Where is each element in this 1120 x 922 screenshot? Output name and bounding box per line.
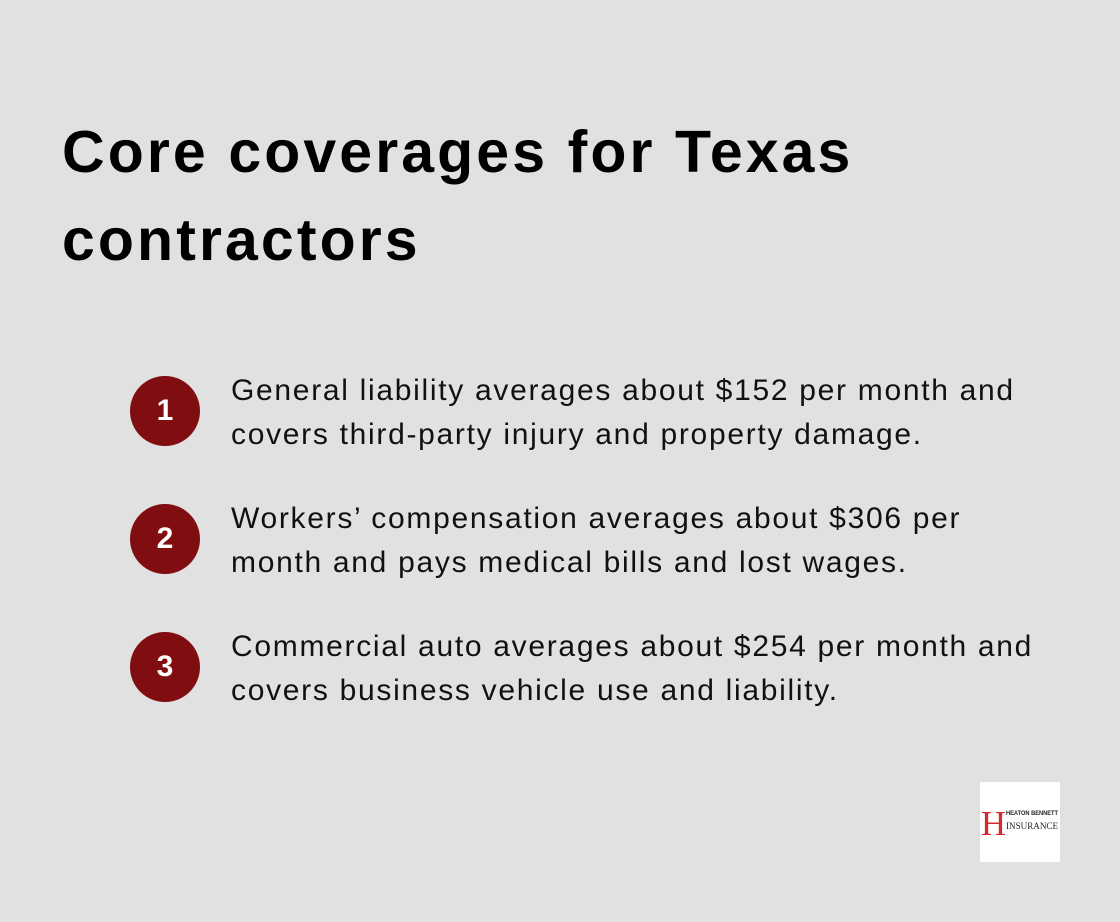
text 2: Workers’ compensation averages about $306 per [231,502,961,535]
text 1: covers third-party injury and property damage. [231,418,923,451]
text 1 [231,374,1015,451]
text 1: General liability averages about $152 per month and [231,374,1015,407]
circle 2: 2 [157,522,173,555]
item 3 [130,630,1033,707]
circle 3: 3 [157,650,173,683]
circle 1: 1 [157,394,173,427]
title: Core coverages for Texas [62,119,853,185]
circle 2 [130,504,200,574]
item 2 [130,502,961,579]
title: contractors [62,207,421,273]
text 2: month and pays medical bills and lost wages. [231,546,908,579]
logo: INSURANCE [1006,822,1058,832]
item 1 [130,374,1015,451]
text 2 [231,502,961,579]
text 3: covers business vehicle use and liability. [231,674,839,707]
circle 3 [130,632,200,702]
logo [980,782,1060,862]
circle 1 [130,376,200,446]
title [62,119,853,273]
logo: HEATON BENNETT [1006,811,1058,817]
text 3: Commercial auto averages about $254 per month and [231,630,1033,663]
logo: H [981,804,1006,843]
text 3 [231,630,1033,707]
